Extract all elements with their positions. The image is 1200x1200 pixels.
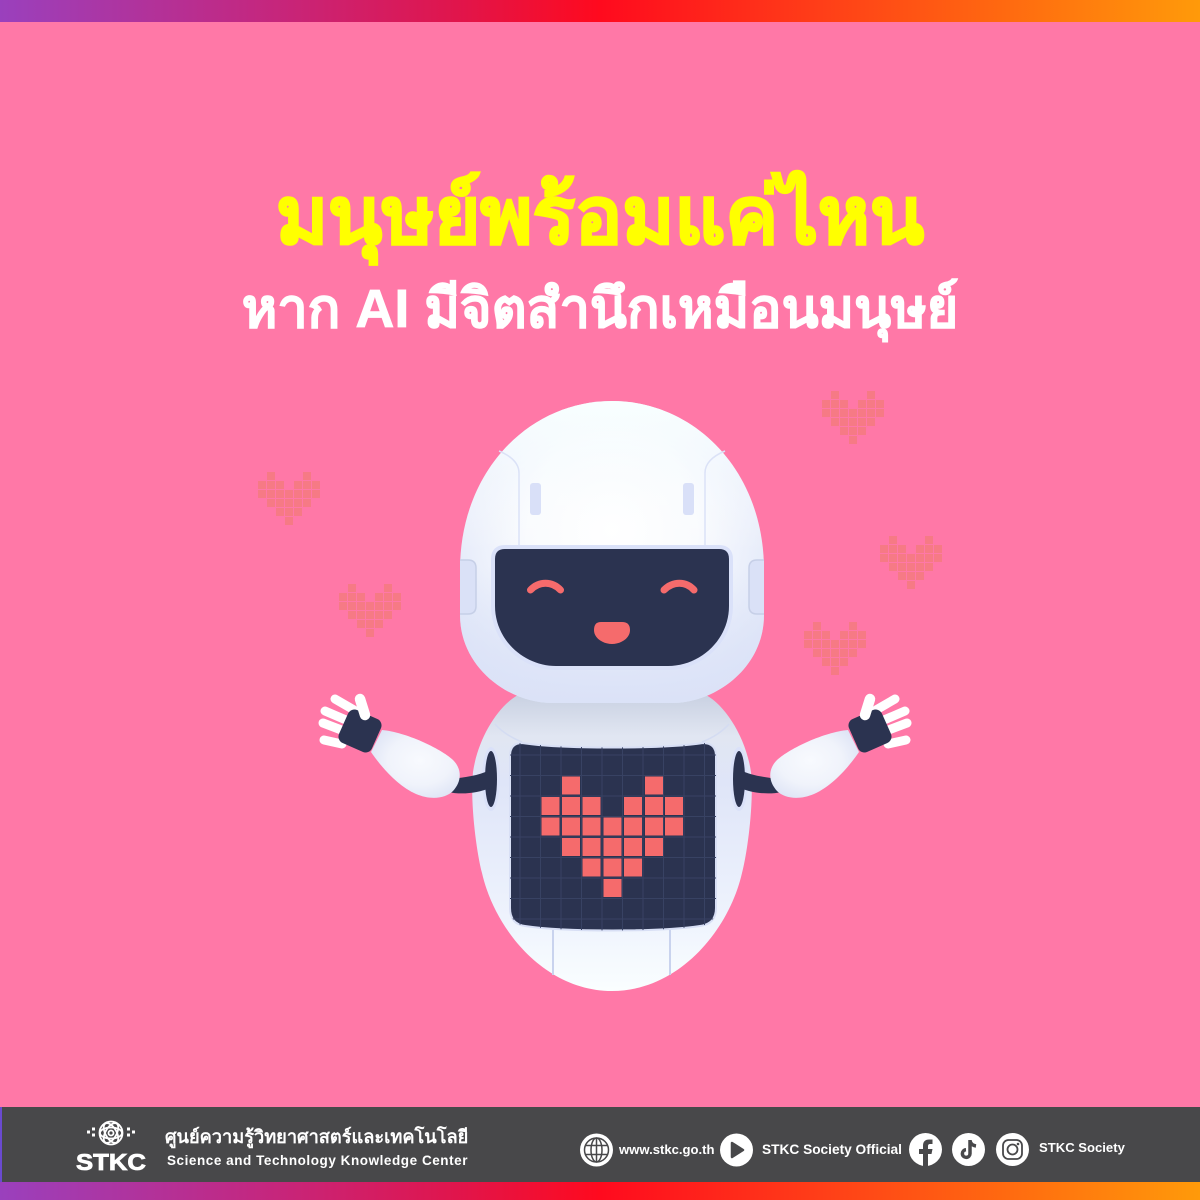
right socket hole [733,751,745,807]
center name Thai: ศูนย์ความรู้วิทยาศาสตร์และเทคโนโลยี [165,1127,468,1147]
icon: tiktok [952,1133,985,1166]
background heart 3 [822,391,884,444]
background heart 1 [258,472,320,525]
social name: STKC Society [1039,1140,1125,1155]
left socket hole [485,751,497,807]
icon: globe [580,1134,613,1166]
logo atom mark [87,1121,135,1145]
website url: www.stkc.go.th [619,1142,715,1157]
left arm socket [482,747,500,811]
robot illustration with hearts [258,391,942,991]
footer logo [76,1120,146,1173]
youtube name: STKC Society Official [762,1142,902,1157]
background heart 5 [804,622,866,675]
subtitle: หาก AI มีจิตสำนึกเหมือนมนุษย์ [242,279,958,339]
background heart 2 [339,584,401,637]
right arm and hand [740,699,907,798]
footer band [0,1107,1200,1182]
center name English: Science and Technology Knowledge Center [167,1153,468,1168]
icon: instagram [996,1133,1029,1166]
chest screen [505,740,720,932]
head vents [530,483,694,515]
mouth [594,622,630,644]
top gradient bar [0,0,1200,22]
title: มนุษย์พร้อมแค่ไหน [276,171,924,260]
bottom gradient bar [0,1182,1200,1200]
ear panels [460,560,764,614]
robot body [472,695,752,991]
left arm and hand [323,699,490,798]
visor [495,549,729,666]
icon: facebook [909,1133,942,1166]
icon: play [720,1134,753,1166]
pixel heart [542,776,683,897]
robot head [460,401,764,703]
eyes [530,583,694,590]
background heart 4 [880,536,942,589]
right arm socket [730,747,748,811]
